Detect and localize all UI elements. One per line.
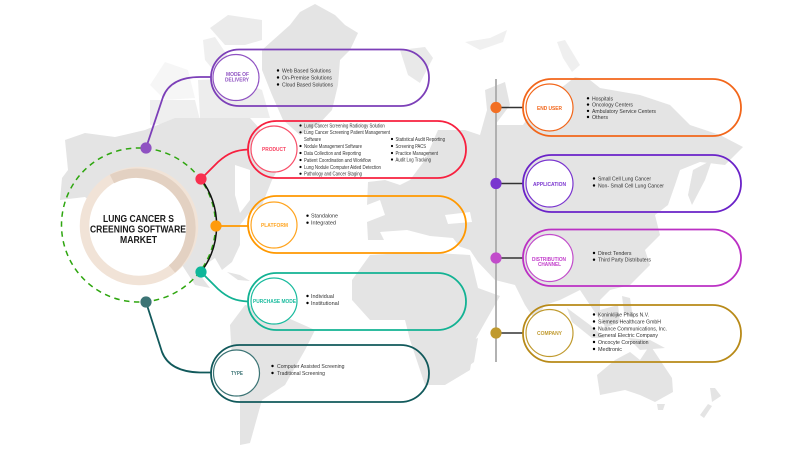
panel: application: Small Cell Lung Cancer <box>598 176 651 182</box>
connector: end user <box>496 106 523 108</box>
panel: type: TYPE <box>231 371 243 377</box>
panel: distribution channel: Direct Tenders <box>598 251 632 257</box>
panel: product: Lung Cancer Screening Patient Management <box>304 130 391 136</box>
beige ring <box>84 172 194 280</box>
connector: mode of delivery <box>146 77 211 148</box>
panel: company: Medtronic <box>598 347 622 353</box>
panel: mode of delivery: Web Based Solutions <box>282 68 331 74</box>
title: MARKET <box>120 234 157 246</box>
panel: product: PRODUCT <box>262 147 286 153</box>
panel: application: APPLICATION <box>533 182 566 188</box>
panel: end user: Ambulatory Service Centers <box>592 109 656 115</box>
darker ring segment <box>112 173 191 269</box>
timeline spine <box>495 79 497 362</box>
panel: product <box>248 121 466 178</box>
node: platform <box>210 220 222 232</box>
panel: application <box>523 155 741 212</box>
panel: mode of delivery: MODE OF <box>226 72 250 78</box>
panel: distribution channel <box>523 230 741 286</box>
connector: company <box>496 332 523 334</box>
panel: purchase mode <box>248 273 466 330</box>
connector: platform <box>216 225 248 227</box>
panel: mode of delivery: DELIVERY <box>225 78 249 84</box>
node: type <box>140 296 152 308</box>
panel: purchase mode: Individual <box>311 294 334 300</box>
center circle <box>62 148 217 302</box>
panel: product: Lung Nodule Computer Aided Detection <box>304 165 381 171</box>
panel: purchase mode: PURCHASE MODE <box>253 299 296 305</box>
panel: mode of delivery: On-Premise Solutions <box>282 76 332 82</box>
panel: platform: Integrated <box>311 221 336 227</box>
panel: product: Pathology and Cancer Staging <box>304 172 362 178</box>
panel: end user: Oncology Centers <box>592 103 633 109</box>
node: application <box>490 178 502 189</box>
panel: type: Traditional Screening <box>277 371 325 377</box>
panel: distribution channel: DISTRIBUTION <box>532 257 566 263</box>
panel: type: Computer Assisted Screening <box>277 364 344 370</box>
node: end user <box>490 102 502 113</box>
connector: distribution channel <box>496 257 523 259</box>
panel: end user <box>523 79 741 136</box>
panel: product: Nodule Management Software <box>304 144 362 150</box>
connector: type <box>146 302 211 372</box>
panel: company: Oncocyte Corporation <box>598 340 648 346</box>
panel: application: Non- Small Cell Lung Cancer <box>598 184 664 190</box>
panel: distribution channel: CHANNEL <box>538 262 561 268</box>
panel: product: Software <box>304 137 321 143</box>
dashed outer ring <box>62 148 216 302</box>
panel: product: Data Collection and Reporting <box>304 151 361 157</box>
panel: product: Practice Management <box>396 151 439 157</box>
panel: end user: END USER <box>537 106 562 112</box>
panel: product: Lung Cancer Screening Radiology Solution <box>304 123 385 129</box>
panel: company <box>523 305 741 362</box>
panel: product: Audit Log Tracking <box>396 157 431 163</box>
panel: company: COMPANY <box>537 331 562 337</box>
panel: company: General Electric Company <box>598 333 658 339</box>
panel: end user: Others <box>592 115 608 121</box>
panel: end user: Hospitals <box>592 96 613 102</box>
node: purchase mode <box>195 266 207 278</box>
panel: type <box>211 345 429 402</box>
node: product <box>195 173 207 185</box>
panel: purchase mode: Institutional <box>311 301 339 307</box>
panel: company: Siemens Healthcare GmbH <box>598 320 661 326</box>
panel: mode of delivery: Cloud Based Solutions <box>282 82 333 88</box>
panel: company: Koninklijke Philips N.V. <box>598 312 649 318</box>
panel: product: Statistical Audit Reporting <box>396 137 445 143</box>
node: company <box>490 327 502 339</box>
node: distribution channel <box>490 252 502 264</box>
title <box>90 213 186 246</box>
connector: product <box>201 150 248 179</box>
panel: platform <box>248 196 466 253</box>
node: mode of delivery <box>140 142 152 154</box>
title: LUNG CANCER S <box>103 213 174 225</box>
panel: company: Nuance Communications, Inc. <box>598 326 667 332</box>
panel: platform: PLATFORM <box>261 223 288 229</box>
connector: application <box>496 182 523 184</box>
panel: platform: Standalone <box>311 214 338 220</box>
panel: product: Patient Coordination and Workflow <box>304 158 371 164</box>
panel: mode of delivery <box>211 50 429 106</box>
solid arc <box>201 179 217 272</box>
connector: purchase mode <box>201 272 248 302</box>
title: CREENING SOFTWARE <box>90 224 186 236</box>
panel: distribution channel: Third Party Distributers <box>598 258 651 264</box>
panel: product: Screening PACS <box>396 144 427 150</box>
